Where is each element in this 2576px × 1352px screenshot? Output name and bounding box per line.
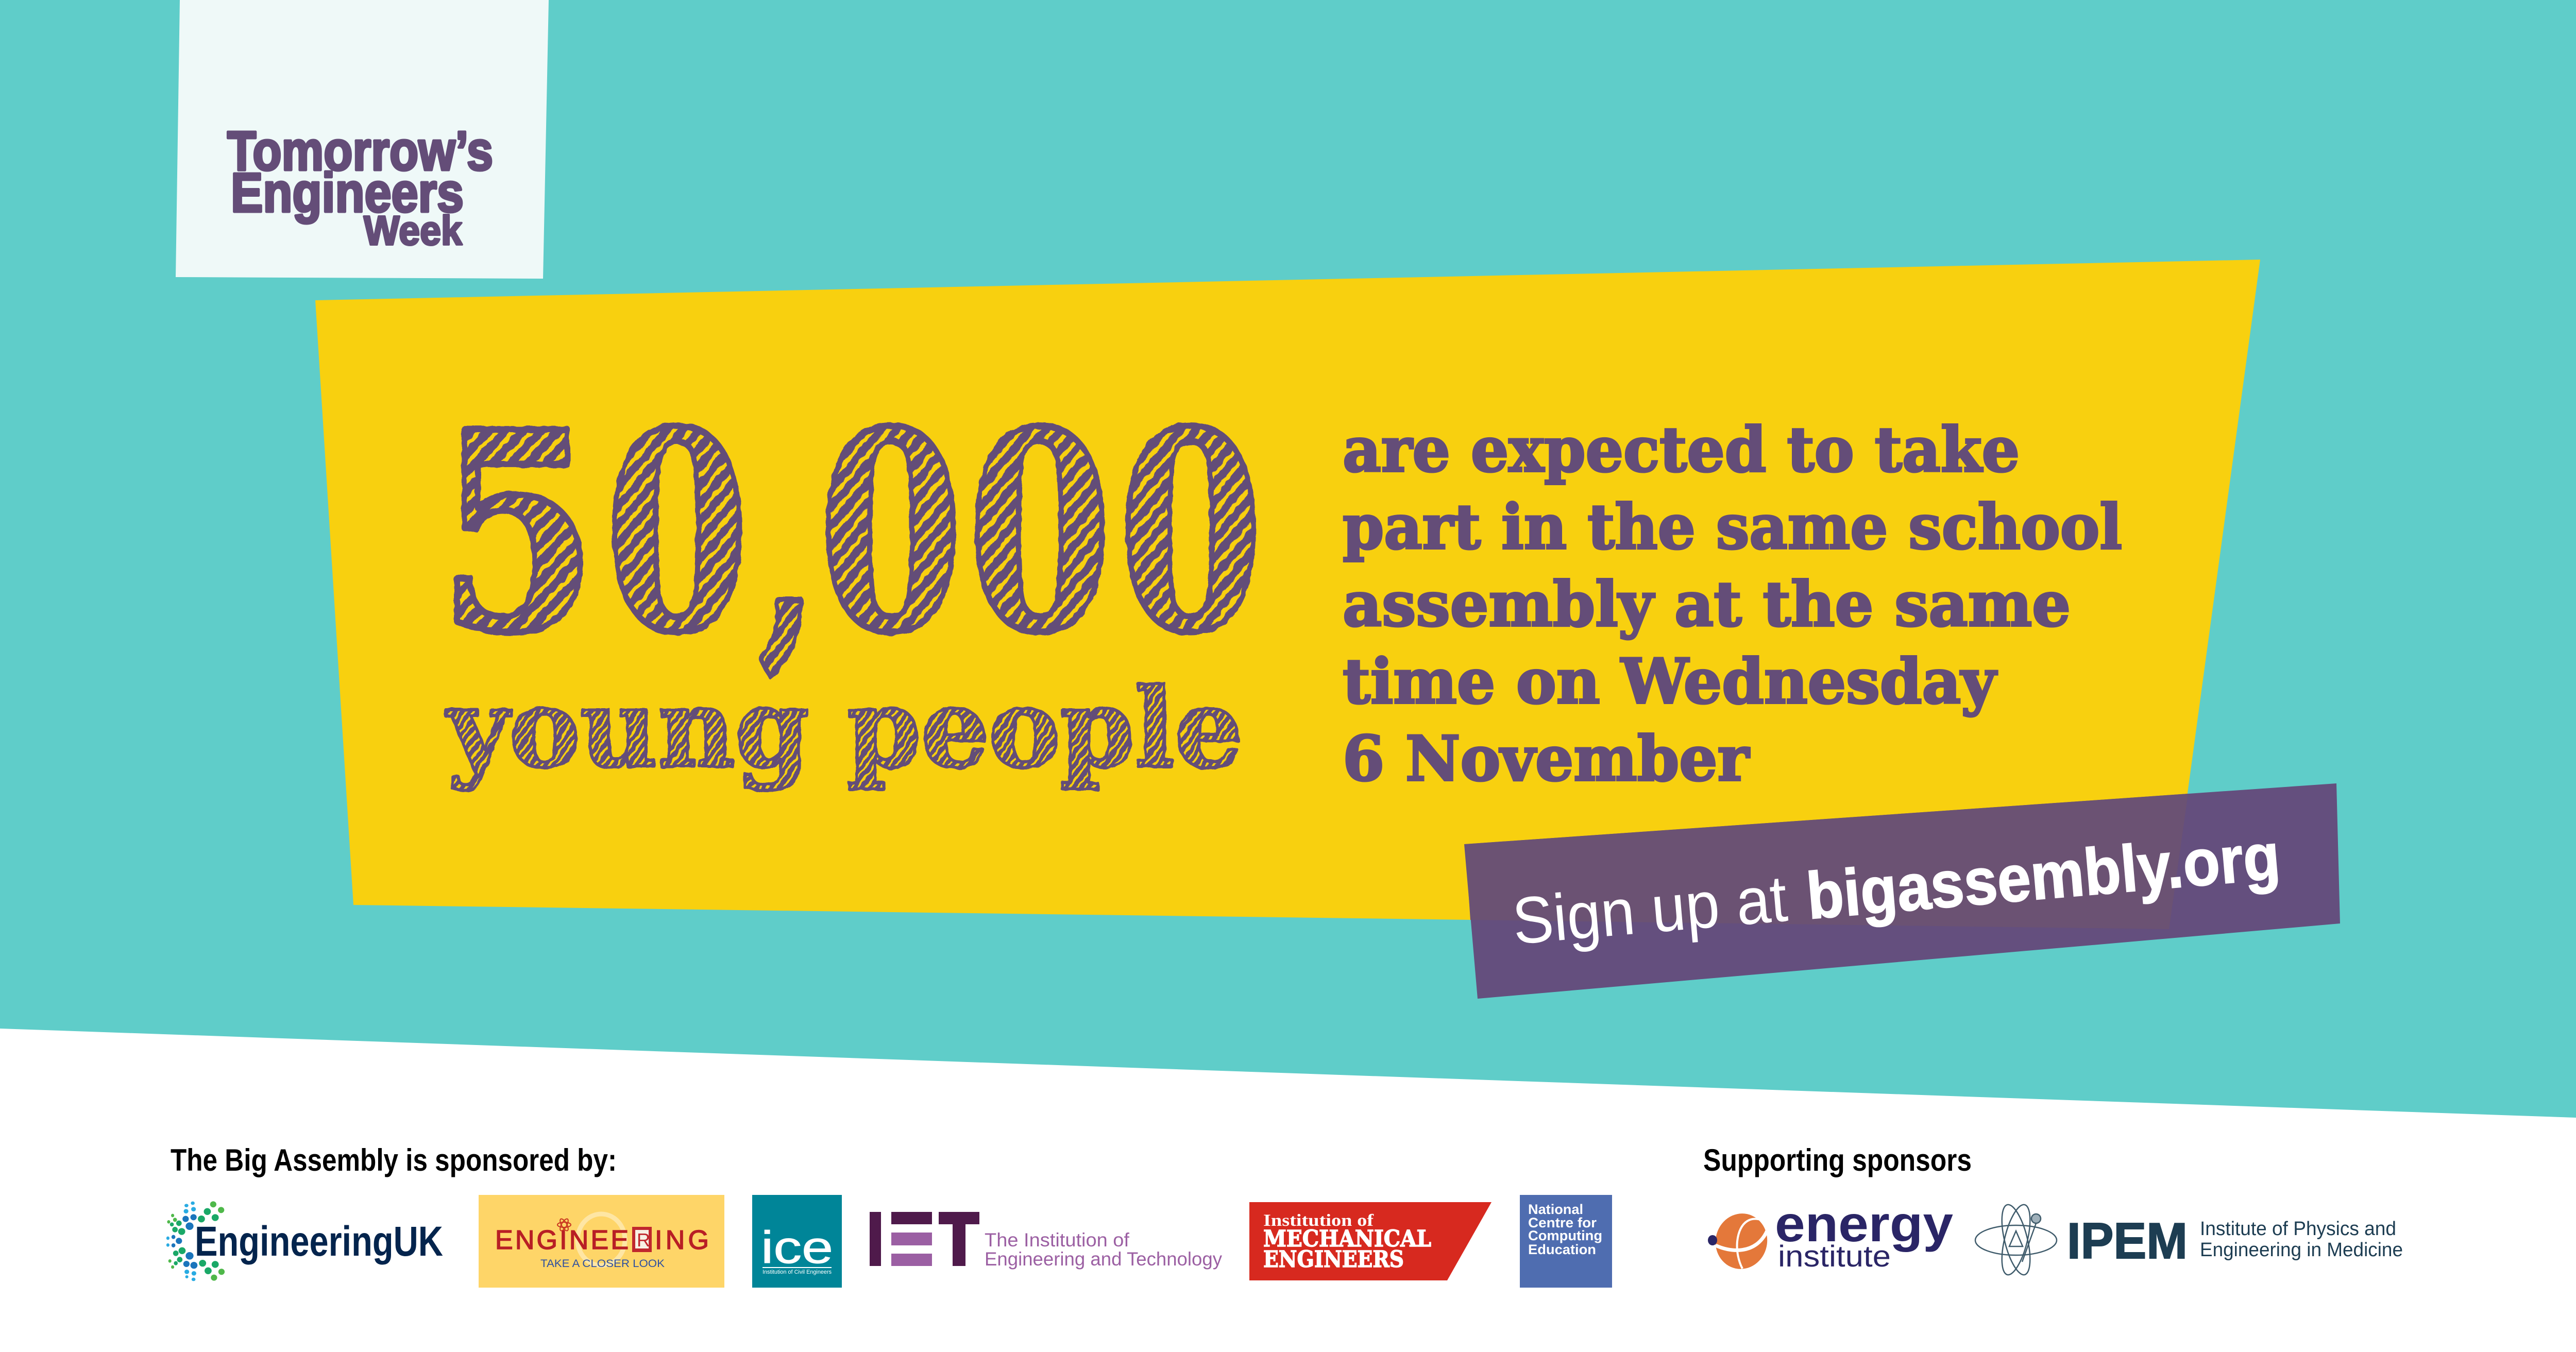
logo: Institute of Physics and Engineering in Medicine: IPEM xyxy=(2067,1212,2188,1269)
headline number: 50,000: 0 xyxy=(968,372,1112,693)
logo: Institution of Mechanical Engineers xyxy=(1249,1202,1492,1280)
text block: event details: are expected to take xyxy=(1343,414,2020,486)
logo: Institute of Physics and Engineering in Medicine: Institute of Physics and xyxy=(2200,1218,2396,1240)
icon: atom xyxy=(557,1218,571,1232)
subheading: young people: young people xyxy=(446,664,1243,792)
logo: Tomorrow's Engineers Week: Tomorrow’s xyxy=(227,119,493,182)
headline number: 50,000: 0 xyxy=(819,372,963,693)
logo: Institution of Mechanical Engineers: ENGINEERS xyxy=(1263,1246,1404,1273)
logo: Engineering take a closer look xyxy=(479,1195,724,1288)
icon: orange globe xyxy=(1708,1209,1772,1274)
logo: Institution of Mechanical Engineers: MECHANICAL xyxy=(1263,1226,1431,1252)
logo: National Centre for Computing Education: Education xyxy=(1528,1242,1596,1257)
logo: Tomorrow's Engineers Week xyxy=(227,119,493,253)
logo: Tomorrow's Engineers Week: Engineers xyxy=(231,161,464,224)
panel: logo tab xyxy=(176,0,549,279)
text block: event details: assembly at the same xyxy=(1343,568,2071,641)
logo: National Centre for Computing Education xyxy=(1520,1195,1612,1288)
headline number: 50,000 xyxy=(438,372,1263,693)
logo: Institution of Mechanical Engineers: Institution of xyxy=(1263,1211,1374,1230)
panel: white sponsor band xyxy=(0,1029,2576,1352)
logo: Institute of Physics and Engineering in Medicine: Engineering in Medicine xyxy=(2200,1239,2403,1261)
text block: event details: part in the same school xyxy=(1343,491,2122,563)
headline number: 50,000: 5 xyxy=(438,372,598,693)
logo: Tomorrow's Engineers Week: Week xyxy=(364,208,462,253)
callout text: sign up address: Sign up at xyxy=(1510,862,1790,959)
icon: dot cluster xyxy=(166,1201,225,1281)
heading: supporting sponsors: Supporting sponsors xyxy=(1703,1143,1972,1177)
headline number: 50,000: , xyxy=(758,414,817,693)
text block: event details xyxy=(1343,414,2122,795)
logo: Institution of Civil Engineers: ice xyxy=(761,1222,833,1273)
callout: sign up banner xyxy=(1464,783,2340,999)
heading: sponsors: The Big Assembly is sponsored by: xyxy=(171,1143,617,1177)
logo: National Centre for Computing Education: Computing xyxy=(1528,1228,1602,1243)
logo: Institution of Civil Engineers xyxy=(752,1195,842,1288)
text block: event details: time on Wednesday xyxy=(1343,645,1997,718)
logo: Energy Institute: energy xyxy=(1775,1195,1953,1252)
logo: Energy Institute xyxy=(1708,1195,1953,1274)
callout text: sign up address xyxy=(1510,819,2283,959)
panel: yellow banner xyxy=(315,260,2260,929)
wordmark: EngineeringUK: EngineeringUK xyxy=(195,1218,443,1265)
logo: National Centre for Computing Education: National xyxy=(1528,1202,1583,1217)
logo: Engineering take a closer look: ING xyxy=(655,1225,709,1255)
headline number: 50,000: 0 xyxy=(605,372,749,693)
logo: Energy Institute: institute xyxy=(1778,1240,1891,1273)
headline number: 50,000: 0 xyxy=(1118,372,1263,693)
logo: Institute of Physics and Engineering in Medicine xyxy=(1975,1202,2403,1277)
logo: Institution of Civil Engineers: Institution of Civil Engineers xyxy=(762,1269,832,1275)
logo: National Centre for Computing Education: Centre for xyxy=(1528,1215,1597,1230)
logo: Engineering take a closer look: TAKE A CLOSER LOOK xyxy=(540,1258,665,1270)
text block: event details: 6 November xyxy=(1343,723,1750,795)
logo: Engineering take a closer look: ENGINEE xyxy=(495,1225,629,1255)
icon: atom xyxy=(1975,1202,2057,1277)
callout text: sign up address: bigassembly.org xyxy=(1804,819,2283,933)
logo: The Institution of Engineering and Technology: Engineering and Technology xyxy=(985,1248,1222,1270)
logo: The Institution of Engineering and Technology xyxy=(870,1212,1222,1270)
logo: EngineeringUK xyxy=(166,1201,443,1281)
icon: tablet letter R: R xyxy=(637,1229,650,1251)
logo: The Institution of Engineering and Technology: The Institution of xyxy=(985,1229,1130,1251)
icon: tablet letter R xyxy=(632,1227,652,1252)
